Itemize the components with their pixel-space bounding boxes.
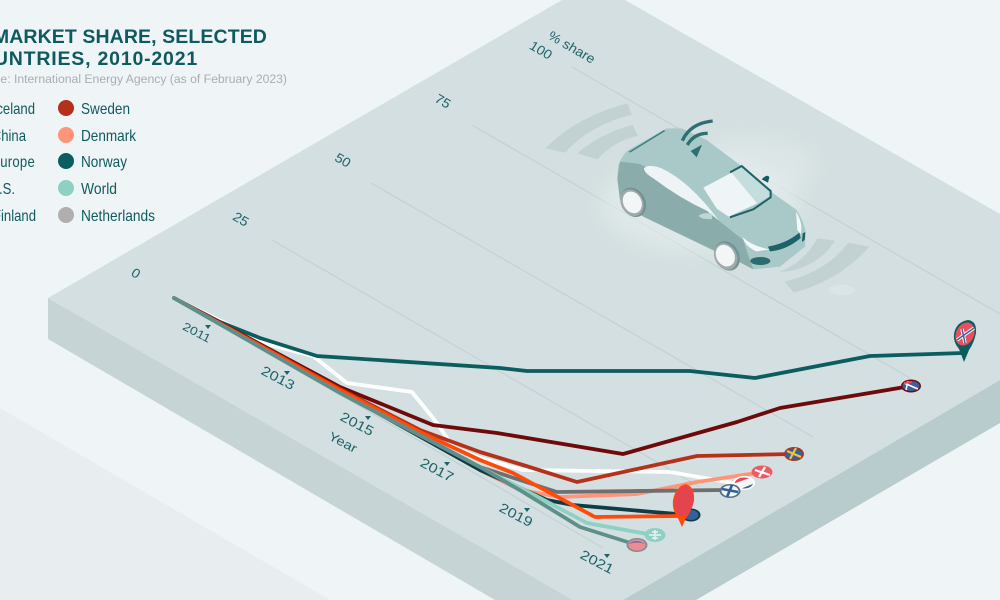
flag: Finland bbox=[720, 484, 740, 498]
legend: Sweden bbox=[81, 101, 130, 118]
flag: China pin bbox=[672, 484, 696, 527]
fog light bbox=[750, 257, 770, 265]
title bbox=[0, 26, 267, 70]
x axis labels: Year bbox=[326, 428, 360, 456]
x axis labels: 2011 bbox=[181, 319, 213, 345]
x axis labels: 2021 bbox=[578, 548, 616, 578]
side window bbox=[644, 166, 719, 221]
x axis ticks bbox=[205, 325, 610, 558]
y axis labels: 25 bbox=[230, 209, 251, 229]
y axis labels: 50 bbox=[332, 150, 354, 171]
line: Sweden bbox=[174, 298, 793, 482]
line: Netherlands bbox=[174, 298, 733, 483]
y axis labels: % share bbox=[546, 28, 598, 66]
flag: U.S. bbox=[626, 538, 648, 552]
windscreen bbox=[703, 166, 771, 217]
antenna fin bbox=[762, 176, 769, 183]
legend: Denmark bbox=[81, 128, 137, 145]
line: World bbox=[174, 298, 653, 535]
background band bbox=[0, 408, 330, 600]
line: Finland bbox=[174, 298, 723, 492]
legend: Norway bbox=[81, 154, 127, 171]
flag: Sweden bbox=[784, 447, 804, 461]
sensor waves front bbox=[779, 238, 869, 293]
roof stripe bbox=[628, 130, 665, 152]
x axis labels: 2017 bbox=[418, 456, 456, 486]
line: Europe bbox=[174, 298, 690, 515]
legend: Netherlands bbox=[81, 208, 155, 225]
rear wheel bbox=[616, 183, 651, 222]
x axis labels bbox=[181, 319, 616, 578]
flag: Europe bbox=[682, 508, 700, 522]
line: U.S. bbox=[174, 298, 637, 545]
front wheel bbox=[709, 237, 745, 275]
flag: Denmark bbox=[752, 466, 772, 478]
wifi icon bbox=[682, 121, 713, 157]
car body bbox=[617, 128, 806, 269]
x axis labels: 2013 bbox=[259, 364, 297, 394]
glow spot bbox=[828, 285, 855, 295]
value gridlines bbox=[174, 67, 1000, 548]
line chart bbox=[174, 298, 963, 545]
y axis labels: 100 bbox=[527, 38, 555, 63]
y axis labels: 75 bbox=[432, 91, 453, 111]
car illustration bbox=[545, 103, 869, 295]
legend: World bbox=[81, 181, 117, 198]
legend bbox=[0, 100, 155, 225]
y axis labels: 0 bbox=[129, 265, 143, 282]
car side panel bbox=[617, 162, 753, 269]
grille bbox=[768, 233, 801, 251]
x axis labels: 2015 bbox=[338, 410, 376, 440]
line: Denmark bbox=[174, 298, 763, 497]
flag: Iceland bbox=[901, 380, 921, 392]
glow around car bbox=[600, 137, 817, 253]
flag: World bbox=[644, 528, 666, 542]
line: Norway bbox=[174, 298, 963, 378]
headlight bbox=[743, 237, 770, 251]
mirror bbox=[698, 213, 713, 219]
flag: Netherlands bbox=[734, 476, 755, 490]
y axis labels bbox=[129, 28, 598, 282]
line: Iceland bbox=[174, 298, 911, 454]
x axis labels: 2019 bbox=[497, 501, 535, 531]
flag: Norway pin bbox=[952, 319, 978, 362]
sensor waves rear bbox=[545, 103, 638, 159]
line: China bbox=[174, 298, 680, 517]
